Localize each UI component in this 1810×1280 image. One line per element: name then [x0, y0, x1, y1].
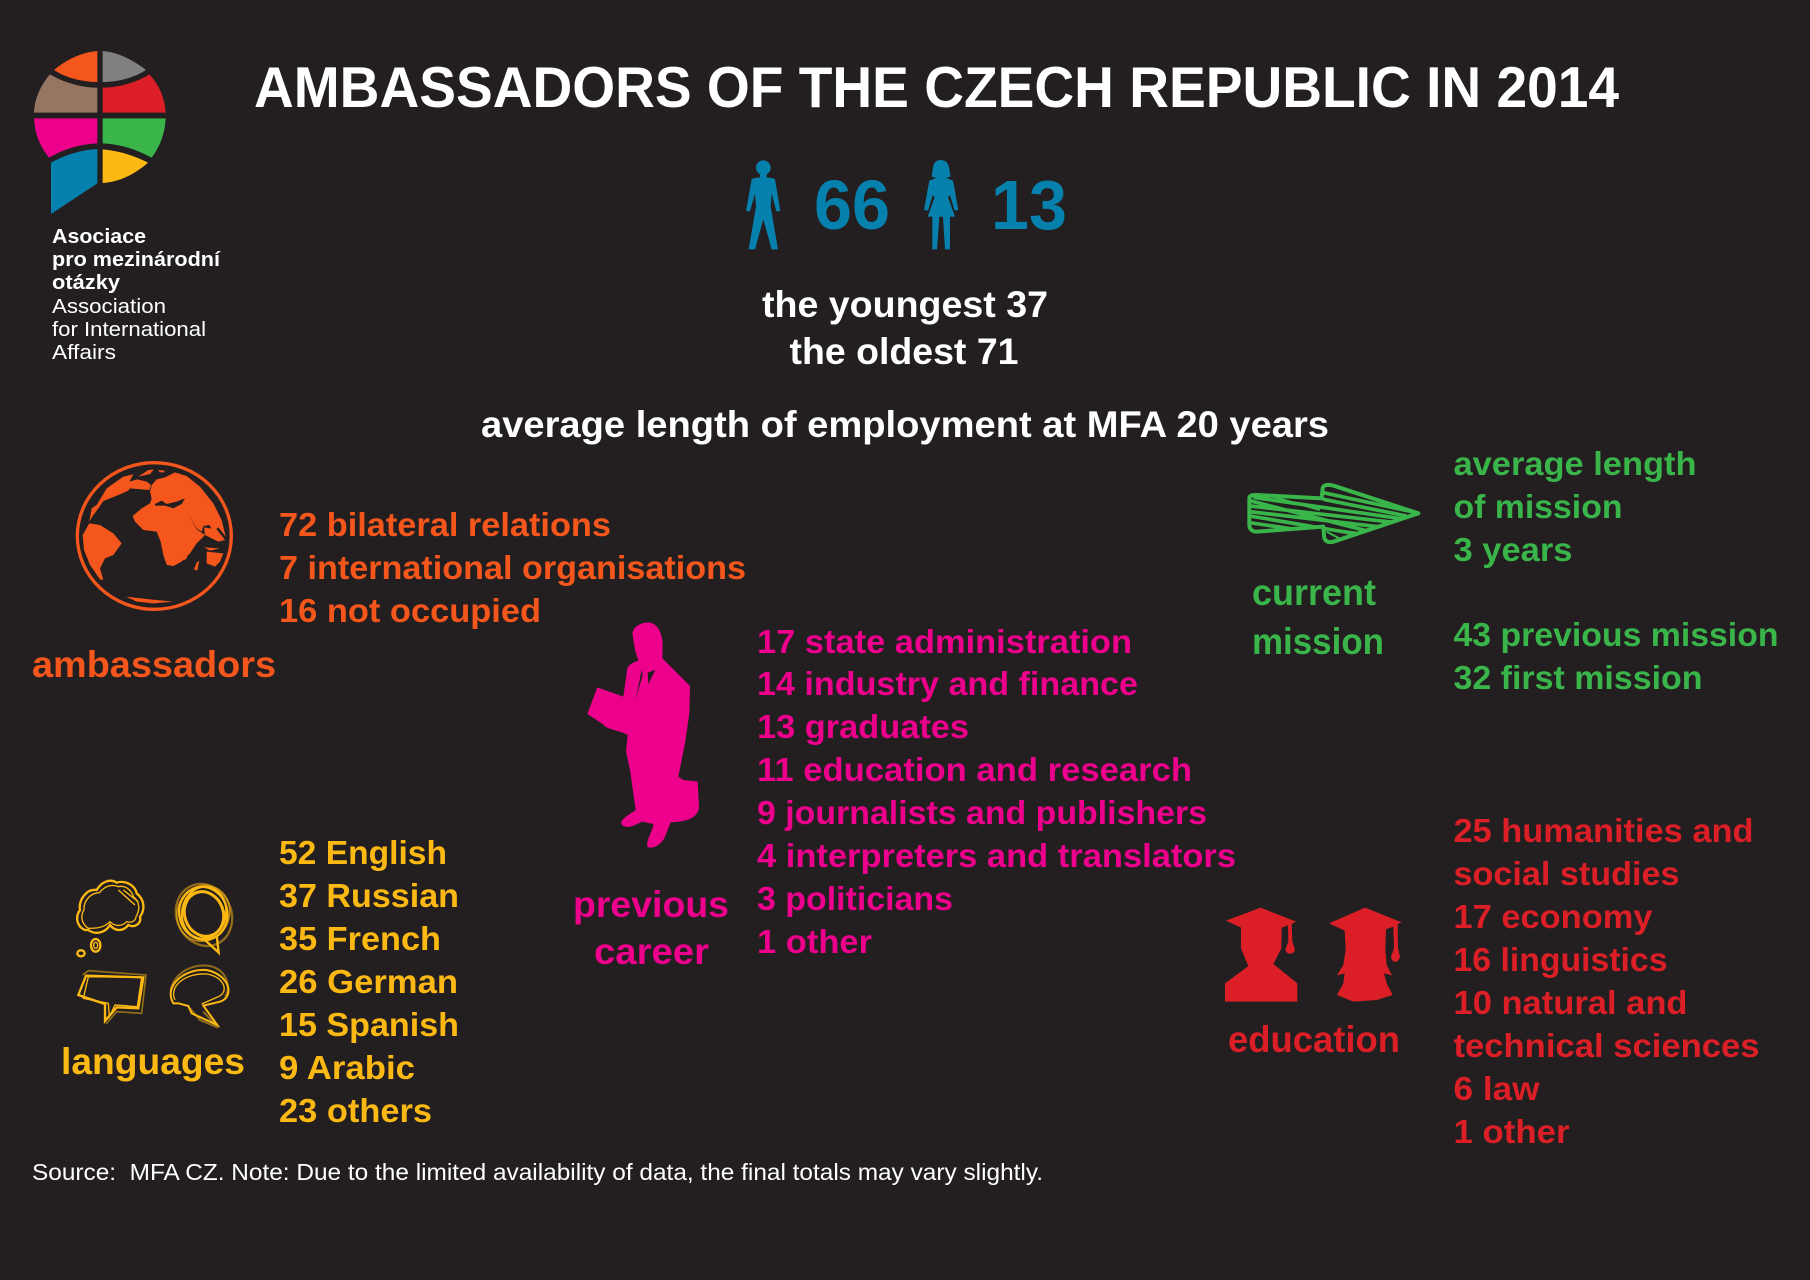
- icon: thought cloud: [77, 881, 143, 956]
- list: languages: 37 Russian: [279, 878, 459, 915]
- panel: previous career: [573, 623, 1236, 972]
- age and employment facts: [481, 284, 1329, 445]
- list: education fields: 1 other: [1454, 1114, 1570, 1151]
- icon: male graduate: [1225, 908, 1297, 1002]
- list: career backgrounds: [757, 624, 1236, 961]
- list: career backgrounds: 3 politicians: [757, 881, 953, 918]
- list: education fields: 25 humanities and: [1454, 813, 1754, 850]
- label: ambassadors: ambassadors: [32, 644, 276, 685]
- label: education: education: [1228, 1019, 1400, 1060]
- list: ambassadors posts: 16 not occupied: [279, 593, 541, 630]
- list: education fields: technical sciences: [1454, 1028, 1760, 1065]
- logo text: Asociace: [52, 225, 146, 248]
- age and employment facts: average length of employment at MFA 20 years: [481, 404, 1329, 445]
- icon: rectangular bubble: [78, 971, 146, 1024]
- list: education fields: [1454, 813, 1760, 1151]
- list: mission facts: 3 years: [1454, 532, 1572, 569]
- logo text: for International: [52, 318, 206, 341]
- number of women: 13: [991, 166, 1067, 244]
- list: education fields: social studies: [1454, 856, 1680, 893]
- number of men: 66: [814, 166, 890, 244]
- logo: Association for International Affairs: [34, 51, 221, 364]
- label: previous career: previous: [573, 884, 729, 925]
- panel: education: [1225, 813, 1760, 1151]
- icon: round bubble: [166, 875, 242, 955]
- icon: globe: [77, 463, 231, 609]
- gender counts: [746, 160, 1067, 249]
- list: mission facts: of mission: [1454, 489, 1622, 526]
- label: current mission: current: [1252, 572, 1376, 613]
- label: current mission: [1252, 572, 1384, 662]
- list: languages: 9 Arabic: [279, 1050, 415, 1087]
- icon: female graduate: [1329, 908, 1402, 1002]
- label: previous career: career: [594, 931, 709, 972]
- source note: Source: MFA CZ. Note: Due to the limited availability of data, the final totals may vary slightly.: [32, 1159, 1043, 1185]
- icon: woman: [924, 160, 958, 249]
- logo mark: speech bubble globe: [34, 51, 166, 214]
- age and employment facts: the oldest 71: [790, 331, 1018, 372]
- list: education fields: 17 economy: [1454, 899, 1653, 936]
- age and employment facts: the youngest 37: [762, 284, 1048, 325]
- list: career backgrounds: 11 education and research: [757, 752, 1192, 789]
- label: current mission: mission: [1252, 621, 1384, 662]
- list: education fields: 16 linguistics: [1454, 942, 1668, 979]
- label: previous career: [573, 884, 729, 972]
- panel: languages: [61, 835, 459, 1130]
- logo text: Association: [52, 295, 166, 318]
- list: languages: 26 German: [279, 964, 458, 1001]
- list: ambassadors posts: [279, 507, 746, 630]
- icon: oval bubble: [171, 966, 229, 1028]
- panel: current mission: [1249, 446, 1778, 697]
- icon: businessman silhouette: [587, 623, 699, 848]
- list: mission facts: average length: [1454, 446, 1696, 483]
- logo text: otázky: [52, 271, 121, 294]
- list: languages: 23 others: [279, 1093, 432, 1130]
- list: ambassadors posts: 72 bilateral relations: [279, 507, 611, 544]
- logo text: Affairs: [52, 341, 116, 364]
- list: languages: 52 English: [279, 835, 447, 872]
- icon: scribbled arrow: [1249, 485, 1418, 542]
- list: languages: 35 French: [279, 921, 441, 958]
- logo text: [52, 225, 221, 364]
- icon: man: [746, 160, 780, 249]
- list: education fields: 6 law: [1454, 1071, 1540, 1108]
- label: languages: languages: [61, 1041, 245, 1082]
- icon: scribbled speech bubbles: [77, 875, 242, 1028]
- list: career backgrounds: 4 interpreters and translators: [757, 838, 1236, 875]
- list: career backgrounds: 1 other: [757, 924, 872, 961]
- list: mission facts: 32 first mission: [1454, 660, 1702, 697]
- list: ambassadors posts: 7 international organisations: [279, 550, 746, 587]
- panel: ambassadors: [32, 463, 746, 685]
- list: languages: 15 Spanish: [279, 1007, 459, 1044]
- list: career backgrounds: 13 graduates: [757, 709, 969, 746]
- list: languages: [279, 835, 459, 1130]
- list: career backgrounds: 9 journalists and publishers: [757, 795, 1207, 832]
- title: AMBASSADORS OF THE CZECH REPUBLIC IN 2014: [254, 56, 1619, 120]
- list: mission facts: [1454, 446, 1778, 697]
- list: career backgrounds: 14 industry and finance: [757, 666, 1138, 703]
- list: education fields: 10 natural and: [1454, 985, 1688, 1022]
- list: career backgrounds: 17 state administration: [757, 624, 1132, 661]
- logo text: pro mezinárodní: [52, 248, 221, 271]
- list: mission facts: 43 previous mission: [1454, 617, 1778, 654]
